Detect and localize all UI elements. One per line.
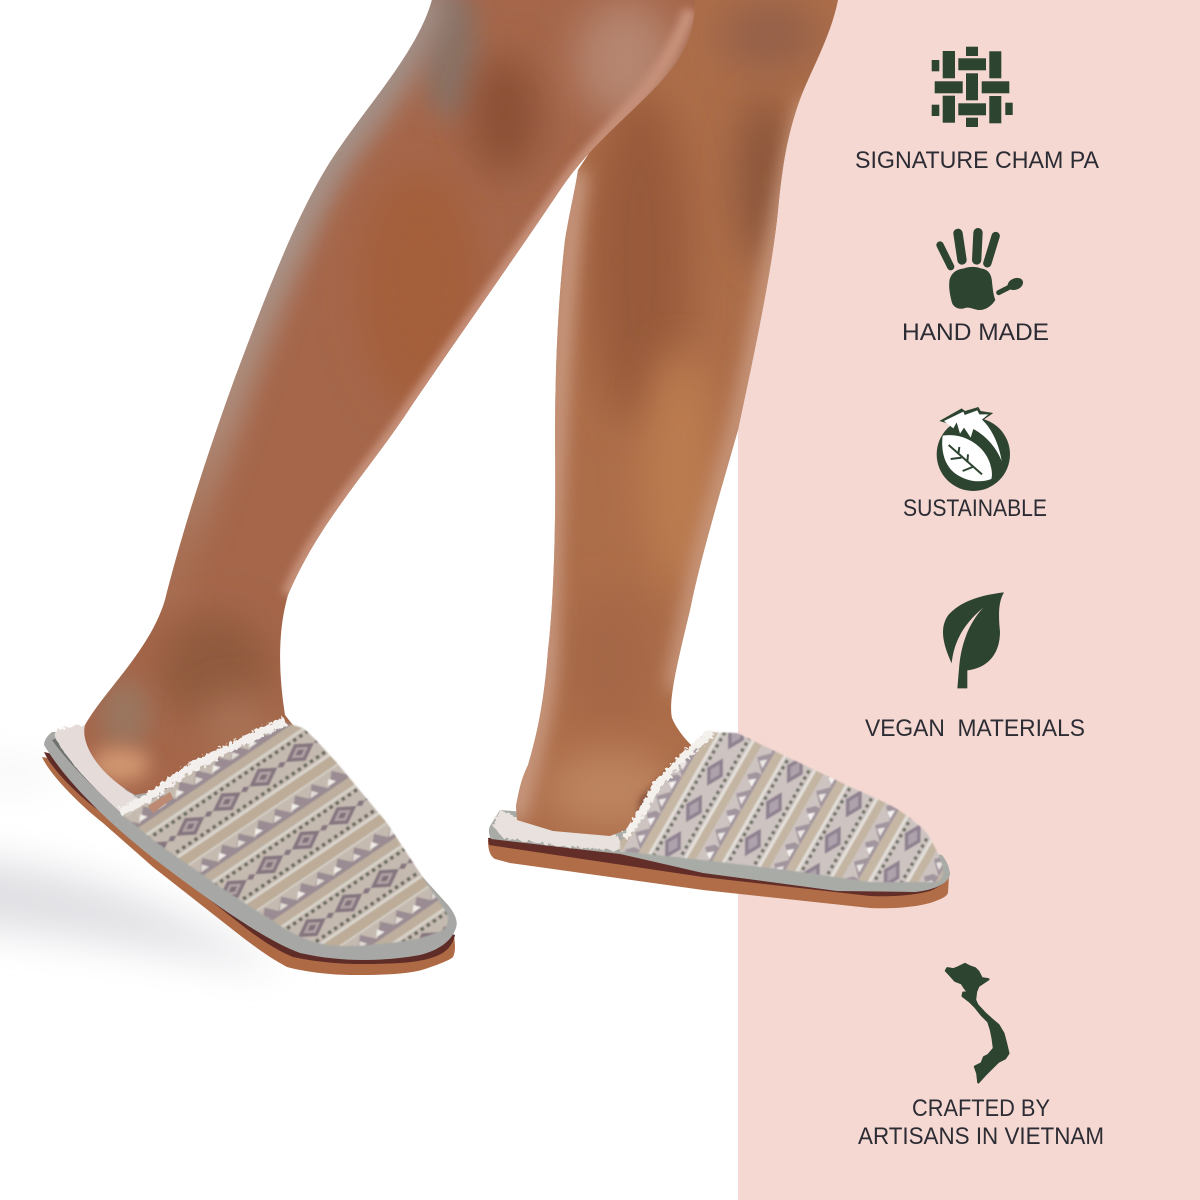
panel: pink background <box>738 0 1200 1200</box>
label: signature cham pa: SIGNATURE CHAM PA <box>855 147 1099 174</box>
icon: woven Cham Pa fabric <box>932 47 1013 127</box>
left slipper: fleece lining <box>54 725 150 816</box>
label: vegan materials: VEGAN MATERIALS <box>865 715 1085 742</box>
icon: hand print <box>940 233 1025 310</box>
icon: vegan leaf <box>943 592 1004 688</box>
left slipper: patterned upper <box>120 721 448 946</box>
right slipper: cork sole and footbed <box>488 810 950 908</box>
photo: left leg <box>84 0 695 795</box>
label: hand made: HAND MADE <box>902 319 1049 346</box>
right slipper: fleece lining <box>493 810 624 851</box>
label: crafted by artisans in Vietnam <box>858 1095 1104 1150</box>
label: sustainable: SUSTAINABLE <box>903 495 1047 522</box>
icon: sustainable leaf badge <box>937 407 1010 491</box>
icon: map of Vietnam <box>946 964 1008 1082</box>
label: crafted by artisans in Vietnam: CRAFTED BY <box>912 1095 1050 1122</box>
photo: right leg <box>516 0 838 836</box>
shadow under left slipper <box>0 758 285 970</box>
left slipper: cork sole and footbed <box>42 725 457 975</box>
label: crafted by artisans in Vietnam: ARTISANS IN VIETNAM <box>858 1123 1104 1150</box>
right slipper: patterned upper <box>620 732 943 882</box>
